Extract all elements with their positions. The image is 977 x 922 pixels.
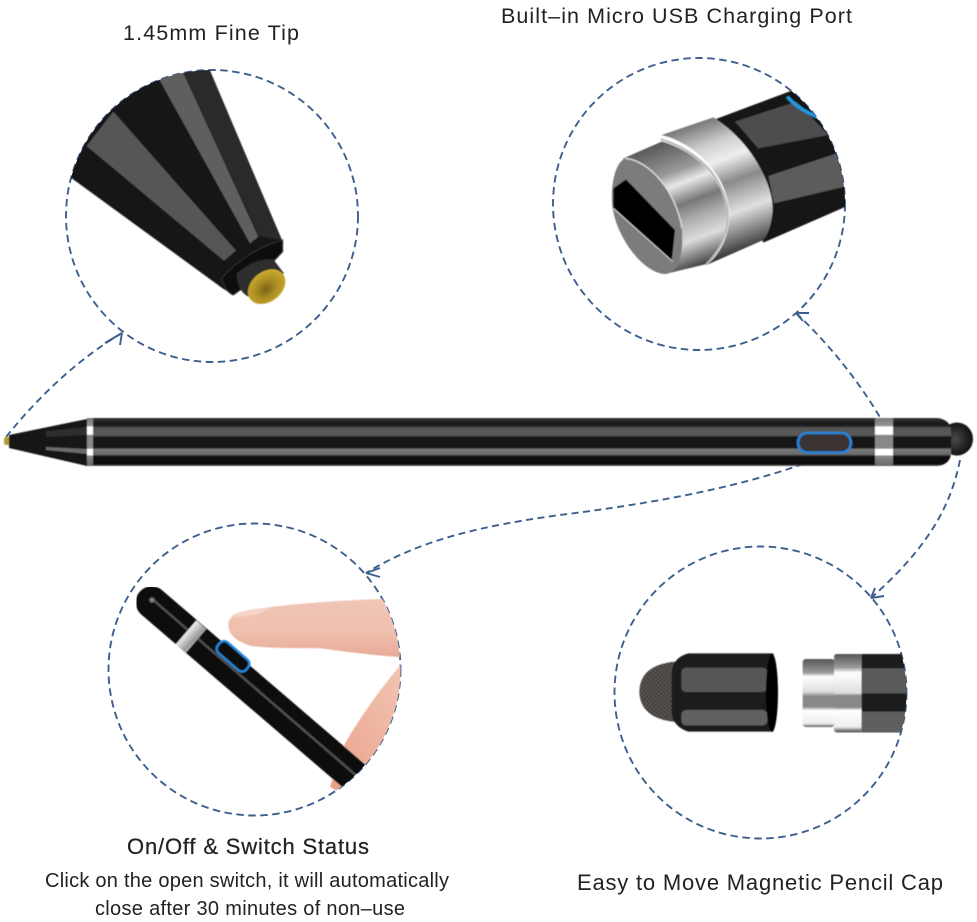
nib [4, 437, 10, 445]
silver stem [803, 659, 835, 727]
rear ball tip [941, 422, 973, 456]
cap segment [893, 418, 951, 466]
silver ring [662, 117, 773, 265]
connector: fine tip to pen tip [6, 333, 122, 437]
heading: on/off and switch status: On/Off & Switch Status [127, 834, 369, 859]
gold nib [247, 268, 286, 305]
silver ring [176, 620, 206, 653]
micro USB slot [613, 179, 675, 262]
front cylinder [623, 142, 727, 274]
callout label: charging port: Built–in Micro USB Charging Port [501, 4, 852, 28]
rear ring [875, 418, 893, 466]
cap opening [766, 654, 778, 732]
lower finger [330, 663, 405, 797]
blue button arc [787, 97, 818, 117]
stylus pen [4, 418, 973, 466]
description: switch behaviour: close after 30 minutes of non–use [95, 898, 405, 920]
collar edge [661, 139, 728, 265]
barrel highlight bands [735, 102, 845, 203]
callout label: magnetic cap: Easy to Move Magnetic Pencil Cap [577, 870, 943, 895]
barrel end [862, 654, 908, 732]
connector: pen cap to magnetic cap panel [871, 460, 960, 598]
collar [222, 240, 283, 295]
angled pen [149, 597, 368, 788]
callout label: fine tip: 1.45mm Fine Tip [123, 21, 299, 45]
barrel highlight bands [862, 668, 908, 732]
upper finger [228, 598, 402, 657]
connector: pen button to switch panel [366, 464, 803, 577]
mesh tip [639, 662, 675, 722]
slot lip [613, 208, 673, 262]
blue button [214, 639, 252, 674]
front ring [87, 418, 93, 466]
fingernail [230, 608, 270, 617]
description: switch behaviour: Click on the open switch, it will automatically [45, 870, 449, 892]
power button [798, 433, 851, 452]
panel: USB charging port magnified view [612, 90, 853, 274]
connector: charging port to pen end [796, 313, 884, 424]
upper cone highlight [46, 427, 87, 437]
panel: on/off switch view [149, 597, 405, 797]
pen cone [9, 419, 87, 466]
cone highlight [46, 447, 87, 454]
cone highlight bands [87, 67, 281, 261]
port face [612, 158, 682, 274]
stem [237, 259, 284, 297]
description: switch behaviour [45, 870, 449, 920]
panel: magnetic pencil cap view [639, 653, 908, 732]
face rim highlight [625, 158, 682, 228]
cap body [672, 653, 773, 732]
dashed circle outlines [66, 58, 906, 838]
barrel [93, 418, 875, 466]
black barrel [713, 90, 853, 243]
silver ring [834, 654, 863, 732]
cap highlight bands [681, 668, 767, 725]
cone body [65, 67, 283, 295]
panel: fine tip magnified view [65, 67, 292, 311]
